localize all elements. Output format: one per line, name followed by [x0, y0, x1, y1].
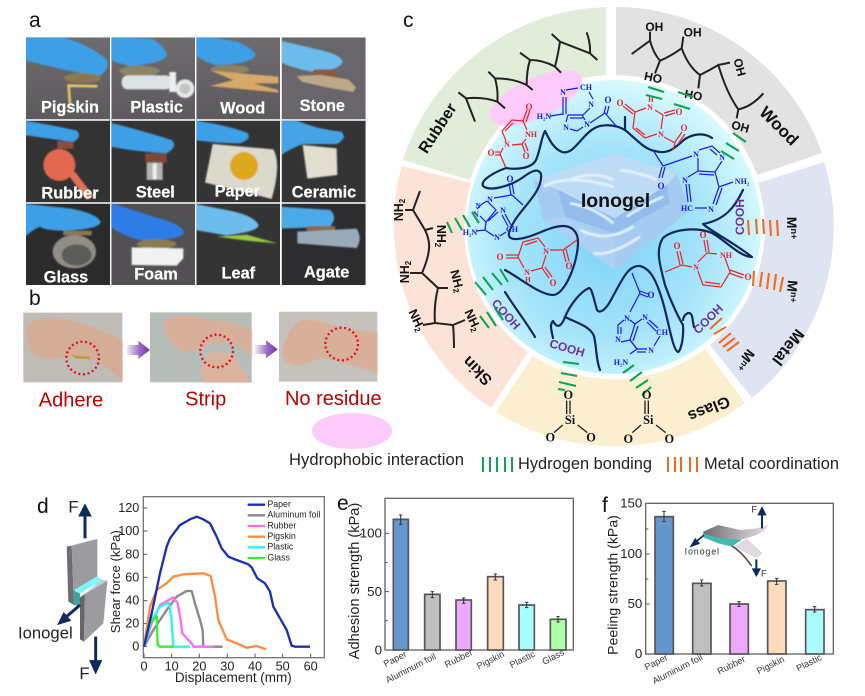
- sector: skin: [394, 166, 528, 408]
- uracil group top: O: [675, 107, 683, 117]
- inset: peel test schematic: F: [751, 505, 757, 515]
- adenine group bottom: CH: [656, 328, 669, 337]
- bar chart: peeling strength: Plastic: [795, 652, 824, 673]
- bar chart: adhesion strength: Plastic: [508, 649, 537, 670]
- hydrogel disc: [467, 80, 761, 374]
- bar chart: peeling strength: Aluminum foil: [651, 652, 704, 686]
- silica group right: [624, 388, 674, 446]
- photo: stone: [282, 37, 366, 120]
- adenine group left: N: [475, 202, 481, 210]
- silica group left: O: [586, 430, 596, 444]
- adenine group left: N: [487, 195, 493, 204]
- sector: wood: [616, 7, 822, 175]
- bar chart: adhesion strength: Rubber: [443, 647, 474, 670]
- skin polymer chain: NH: [406, 307, 426, 329]
- adenine group left: O: [506, 174, 514, 184]
- adenine group left: N: [473, 210, 479, 219]
- uracil group right: O: [744, 272, 752, 282]
- line chart: shear force vs displacement: 60: [304, 659, 318, 673]
- sector label: glass: Glass: [685, 392, 732, 424]
- metal ion labels: M: [784, 280, 801, 293]
- skin polymer chain: [392, 191, 484, 348]
- adenine group left: [463, 174, 523, 242]
- line chart: shear force vs displacement: 50: [276, 659, 290, 673]
- adenine group top-left: CH: [580, 83, 593, 92]
- wood polymer chain: OH: [645, 20, 663, 34]
- bar chart: adhesion strength: Paper: [382, 649, 408, 669]
- skin polymer chain: NH: [462, 307, 482, 329]
- adenine group top-left: N: [588, 100, 594, 109]
- silica group left: [546, 388, 596, 444]
- arrow: ionogel pointer: [60, 605, 80, 623]
- uracil group left: [496, 238, 577, 288]
- adenine group top-left: [537, 83, 617, 132]
- skin polymer chain: 2: [451, 287, 461, 294]
- chart legend: Aluminum foil: [267, 510, 320, 520]
- silica group right: O: [665, 432, 674, 446]
- uracil group top: O: [680, 123, 688, 133]
- adenine group right: O: [657, 181, 665, 191]
- line chart: shear force vs displacement: [108, 497, 324, 685]
- COOH labels: COOH: [690, 301, 726, 337]
- legend: hydrophobic interaction: Hydrophobic interaction: [289, 450, 464, 469]
- bar chart: adhesion strength: 100: [360, 526, 382, 541]
- metal ion labels: n+: [789, 228, 799, 239]
- silica group right: Si: [643, 413, 654, 427]
- bar chart: adhesion strength: [347, 498, 573, 685]
- bar chart: adhesion strength: 0: [375, 642, 382, 657]
- caption: strip: Strip: [185, 389, 226, 411]
- adenine group bottom: N: [615, 335, 621, 344]
- bar chart: adhesion strength: Aluminum foil: [384, 651, 438, 685]
- legend: hydrogen bonding: Hydrogen bonding: [518, 455, 652, 473]
- sector: rubber: [403, 7, 606, 180]
- line chart: shear force vs displacement: 20: [192, 659, 206, 673]
- COOH labels: COOH: [548, 336, 586, 360]
- sector label: skin: Skin: [460, 352, 496, 388]
- metal ion labels: n+: [736, 359, 750, 373]
- adenine group top-left: H₂N: [537, 112, 551, 121]
- photo: plastic: Plastic: [130, 99, 183, 117]
- uracil group right: [665, 230, 752, 287]
- adenine group left: N: [494, 233, 500, 242]
- panel label c: c: [403, 9, 414, 32]
- ionogel block image: [533, 153, 690, 270]
- line chart: shear force vs displacement: 120: [118, 501, 139, 515]
- wood polymer chain: OH: [684, 26, 702, 40]
- adenine group bottom: H₂N: [614, 358, 628, 367]
- uracil group left: N: [524, 268, 530, 277]
- caption: no residue: No residue: [285, 388, 382, 410]
- panel label f: f: [602, 494, 608, 517]
- sector label: wood: Wood: [756, 103, 802, 149]
- line chart: shear force vs displacement: 10: [165, 659, 179, 673]
- skin polymer chain: 2: [412, 326, 423, 334]
- photo: paper: [196, 120, 280, 202]
- uracil group right: O: [699, 230, 707, 240]
- skin polymer chain: 2: [404, 260, 413, 265]
- wood polymer chain: HO: [683, 87, 703, 104]
- photo: rubber: [26, 120, 110, 202]
- COOH labels: COOH: [733, 199, 747, 235]
- sector: metal: [710, 162, 834, 398]
- center title: Ionogel: [581, 190, 650, 212]
- line chart: shear force vs displacement: Displacement (mm): [175, 670, 292, 685]
- photo: foam: [111, 204, 195, 285]
- photo: pigskin: [26, 37, 110, 120]
- adenine group right: N: [719, 153, 725, 162]
- panel b: wrist adhesion sequence: [23, 312, 382, 412]
- skin polymer chain: 2: [398, 198, 407, 203]
- line chart: shear force vs displacement: 20: [125, 617, 139, 631]
- photo: wood: [196, 37, 280, 120]
- bar chart: adhesion strength: Pigskin: [475, 649, 506, 671]
- uracil group top: N: [647, 103, 653, 112]
- panel a: material photos: [23, 35, 366, 287]
- uracil group top-left: N: [504, 140, 510, 149]
- sector: glass: [496, 349, 745, 446]
- line chart: shear force vs displacement: Shear force (kPa): [108, 530, 123, 633]
- polymer backbone chains: [483, 117, 752, 370]
- silica group right: O: [624, 432, 633, 446]
- panel c: interaction diagram: [392, 7, 834, 446]
- chart legend: Paper: [267, 499, 291, 509]
- adenine group right: N: [682, 176, 688, 185]
- photo: steel: [111, 120, 195, 202]
- legend: metal coordination: Metal coordination: [704, 455, 839, 473]
- bar chart: peeling strength: 100: [620, 546, 642, 561]
- photo: no residue: [279, 312, 377, 382]
- uracil group right: O: [673, 241, 681, 251]
- photo: strip: [150, 312, 252, 382]
- inset: peel test schematic: [685, 505, 768, 579]
- photo: leaf: [196, 204, 280, 285]
- metal ion labels: n+: [788, 292, 799, 303]
- COOH labels: [489, 199, 747, 360]
- adenine group bottom: N: [642, 313, 648, 322]
- chart legend: Pigskin: [267, 531, 296, 541]
- uracil group right: N: [693, 263, 699, 272]
- bar chart: peeling strength: Peeling strength (kPa): [604, 515, 620, 655]
- skin polymer chain: 2: [468, 326, 479, 334]
- chart legend: Glass: [267, 552, 290, 562]
- skin polymer chain: NH: [434, 225, 448, 243]
- photo: pigskin: Pigskin: [41, 99, 99, 117]
- panel label a: a: [29, 9, 41, 32]
- skin polymer chain: 2: [433, 243, 442, 248]
- photo: paper: Paper: [215, 183, 261, 201]
- uracil group left: O: [496, 252, 504, 262]
- photo: ceramic: [282, 120, 366, 202]
- force label bottom: F: [79, 664, 90, 683]
- line chart: shear force vs displacement: 40: [248, 659, 262, 673]
- COOH labels: COOH: [489, 296, 523, 332]
- adenine group left: H₂N: [463, 228, 477, 237]
- adenine group right: NH₂: [735, 177, 750, 186]
- silica group right: O: [642, 388, 651, 402]
- skin polymer chain: NH: [447, 268, 465, 289]
- hydrogen bond dashes: [447, 87, 746, 395]
- panel label b: b: [29, 287, 41, 310]
- sector label: metal: Metal: [768, 325, 807, 368]
- line chart: shear force vs displacement: 60: [125, 570, 139, 584]
- bar chart: peeling strength: [604, 495, 833, 686]
- bar chart: adhesion strength: 50: [367, 584, 382, 599]
- line chart: shear force vs displacement: 100: [118, 524, 139, 538]
- line chart: shear force vs displacement: 0: [132, 640, 139, 654]
- photo: foam: Foam: [134, 265, 178, 283]
- inset: peel test schematic: Ionogel: [685, 547, 719, 557]
- metal ion labels: M: [784, 217, 800, 228]
- adenine group top-left: N: [563, 123, 569, 132]
- photo: agate: Agate: [304, 264, 349, 282]
- legend: hydrophobic interaction: [289, 413, 464, 469]
- inset: peel test schematic: F: [761, 569, 767, 579]
- panel label e: e: [337, 492, 349, 515]
- adenine group right: N: [693, 150, 699, 159]
- photo: leaf: Leaf: [222, 264, 256, 282]
- bar chart: peeling strength: 150: [620, 495, 642, 510]
- photo: plastic: [111, 37, 195, 120]
- uracil group top: [616, 96, 688, 150]
- line chart: shear force vs displacement: 40: [125, 594, 139, 608]
- uracil group left: N: [543, 247, 549, 256]
- force label top: F: [68, 498, 79, 517]
- metal ion labels: [732, 217, 801, 374]
- silica group left: O: [546, 430, 555, 444]
- bar chart: peeling strength: 50: [628, 596, 642, 611]
- bar chart: adhesion strength: Glass: [541, 647, 566, 667]
- silica group left: O: [564, 388, 573, 402]
- ionogel label: Ionogel: [18, 623, 73, 642]
- bar chart: peeling strength: Rubber: [716, 654, 747, 676]
- uracil group left: O: [565, 261, 573, 271]
- line chart: shear force vs displacement: 0: [140, 659, 148, 673]
- line chart: shear force vs displacement: 30: [220, 659, 234, 673]
- uracil group right: NH: [720, 251, 733, 260]
- photo: agate: [282, 204, 366, 285]
- wood polymer chain: OH: [730, 57, 749, 78]
- wood polymer chain: OH: [730, 118, 751, 136]
- uracil group top: O: [616, 98, 624, 108]
- adenine group bottom: [614, 273, 669, 367]
- metal coordination dashes: [710, 219, 783, 351]
- adenine group right: HC: [681, 204, 693, 213]
- skin polymer chain: NH: [398, 265, 412, 283]
- adenine group bottom: O: [647, 290, 655, 300]
- adenine group right: N: [708, 205, 714, 214]
- pink hydrophobic ellipse on rubber: [482, 59, 590, 137]
- adenine group left: N: [500, 206, 506, 215]
- bar chart: peeling strength: 0: [635, 646, 642, 661]
- arrow: up force: [81, 507, 89, 538]
- caption: adhere: Adhere: [39, 390, 103, 412]
- chart legend: Plastic: [267, 542, 294, 552]
- photo: ceramic: Ceramic: [292, 184, 356, 202]
- adenine group left: CH: [506, 225, 519, 234]
- uracil group top-left: [487, 102, 538, 168]
- arrow: adhere to strip: [127, 341, 150, 359]
- arrow: down force: [91, 637, 100, 671]
- uracil group left: H: [525, 276, 531, 284]
- shear test schematic: [18, 498, 107, 683]
- silica group left: Si: [565, 413, 576, 427]
- rubber polymer chain: [458, 32, 597, 122]
- bar chart: peeling strength: Paper: [643, 652, 669, 672]
- photo: stone: Stone: [300, 97, 345, 115]
- wood polymer chain: HO: [643, 69, 663, 86]
- bar chart: adhesion strength: Adhesion strength (kPa): [347, 503, 363, 659]
- wood polymer chain: [632, 20, 763, 136]
- photo: steel: Steel: [136, 183, 175, 201]
- skin polymer chain: NH: [392, 203, 406, 221]
- adenine group right: [653, 146, 750, 214]
- chart legend: Rubber: [267, 520, 296, 530]
- arrow: strip to no residue: [255, 340, 278, 358]
- adenine group bottom: N: [624, 314, 630, 323]
- uracil group top: H: [648, 96, 654, 104]
- bar chart: peeling strength: Pigskin: [755, 654, 786, 676]
- uracil group top: N: [658, 130, 664, 139]
- adenine group top-left: N: [560, 88, 566, 97]
- uracil group left: O: [549, 278, 557, 288]
- photo: rubber: Rubber: [41, 184, 99, 202]
- adenine group top-left: O: [604, 95, 612, 105]
- photo: adhere: [23, 313, 122, 382]
- panel label d: d: [37, 495, 49, 518]
- photo: glass: Glass: [44, 269, 88, 287]
- uracil group top-left: O: [522, 151, 530, 161]
- adenine group bottom: N: [648, 346, 654, 355]
- uracil group top-left: NH: [525, 130, 538, 139]
- sector label: rubber: Rubber: [416, 100, 461, 157]
- uracil group top-left: O: [487, 148, 495, 158]
- uracil group top-left: O: [525, 102, 533, 112]
- photo: wood: Wood: [220, 99, 265, 117]
- adenine group top-left: N: [584, 120, 590, 129]
- photo: glass: [26, 204, 110, 287]
- line chart: shear force vs displacement: 80: [125, 547, 139, 561]
- chart legend: [248, 499, 320, 562]
- metal ion labels: M: [738, 346, 758, 365]
